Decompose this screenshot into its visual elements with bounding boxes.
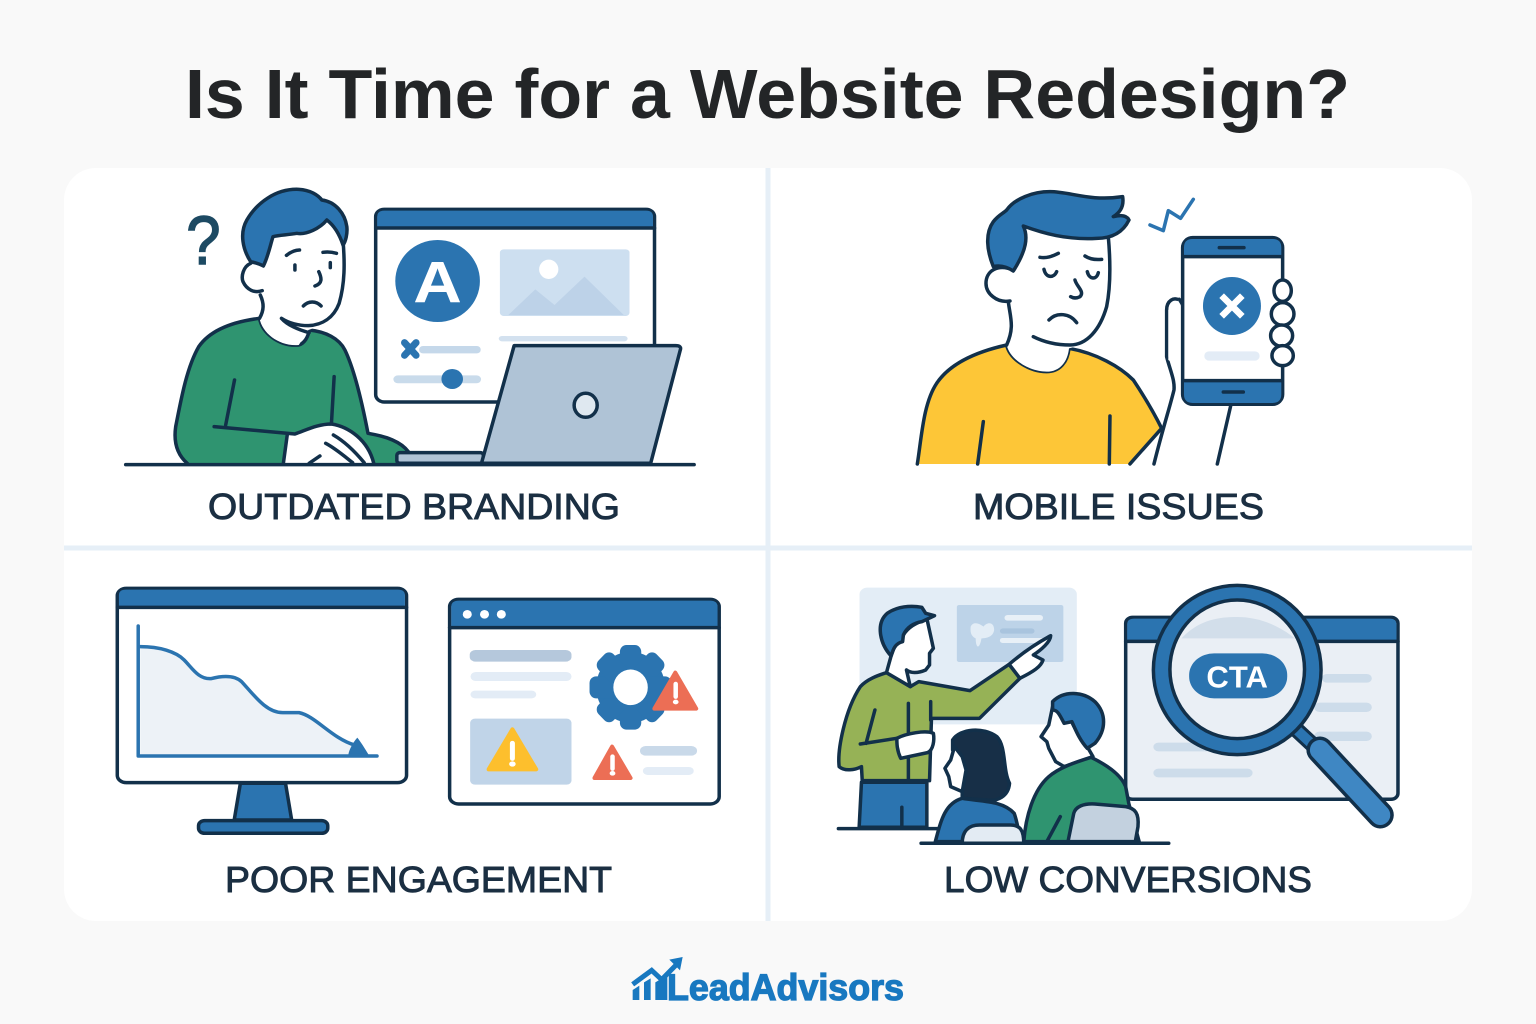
monitor with falling chart [117, 588, 407, 833]
seated woman [935, 730, 1024, 843]
panel: low conversions [838, 585, 1398, 900]
website window [1126, 617, 1398, 799]
laptop [397, 346, 681, 463]
browser with warnings [450, 599, 719, 804]
title: Is It Time for a Website Redesign? [185, 55, 1350, 133]
browser window: A [413, 250, 462, 315]
panel: four-card grid [64, 168, 1472, 921]
panel: outdated branding [126, 189, 694, 527]
icon: frustration zigzag [1150, 199, 1193, 231]
illustration: monitor and broken website [117, 588, 719, 833]
label: outdated branding: OUTDATED BRANDING [208, 486, 620, 527]
label: mobile issues: MOBILE ISSUES [973, 486, 1264, 527]
panel: mobile issues [917, 192, 1294, 527]
logo: LeadAdvisors [633, 957, 904, 1008]
magnifier with CTA: CTA [1206, 660, 1268, 695]
wordmark: LeadAdvisors [667, 967, 904, 1008]
label: poor engagement: POOR ENGAGEMENT [225, 859, 612, 900]
presenter [839, 606, 1051, 827]
icon: growth bars and arrow [633, 957, 683, 1000]
hand and arm [1154, 299, 1231, 464]
icon: gear [590, 645, 672, 730]
fingers [1271, 280, 1294, 366]
illustration: team and CTA magnifier [838, 585, 1398, 843]
label: low conversions: LOW CONVERSIONS [944, 859, 1312, 900]
person in yellow shirt [917, 192, 1162, 464]
person in green sweater [175, 189, 408, 463]
browser window [376, 209, 655, 402]
seated man [1024, 694, 1139, 842]
illustration: sad person holding phone [917, 192, 1294, 464]
illustration: person with old website and laptop [126, 189, 694, 465]
icon: question mark: ? [186, 202, 220, 279]
phone with error [1183, 238, 1283, 404]
magnifier with CTA [1153, 585, 1380, 815]
panel: poor engagement [117, 588, 719, 900]
presentation board [860, 588, 1077, 724]
